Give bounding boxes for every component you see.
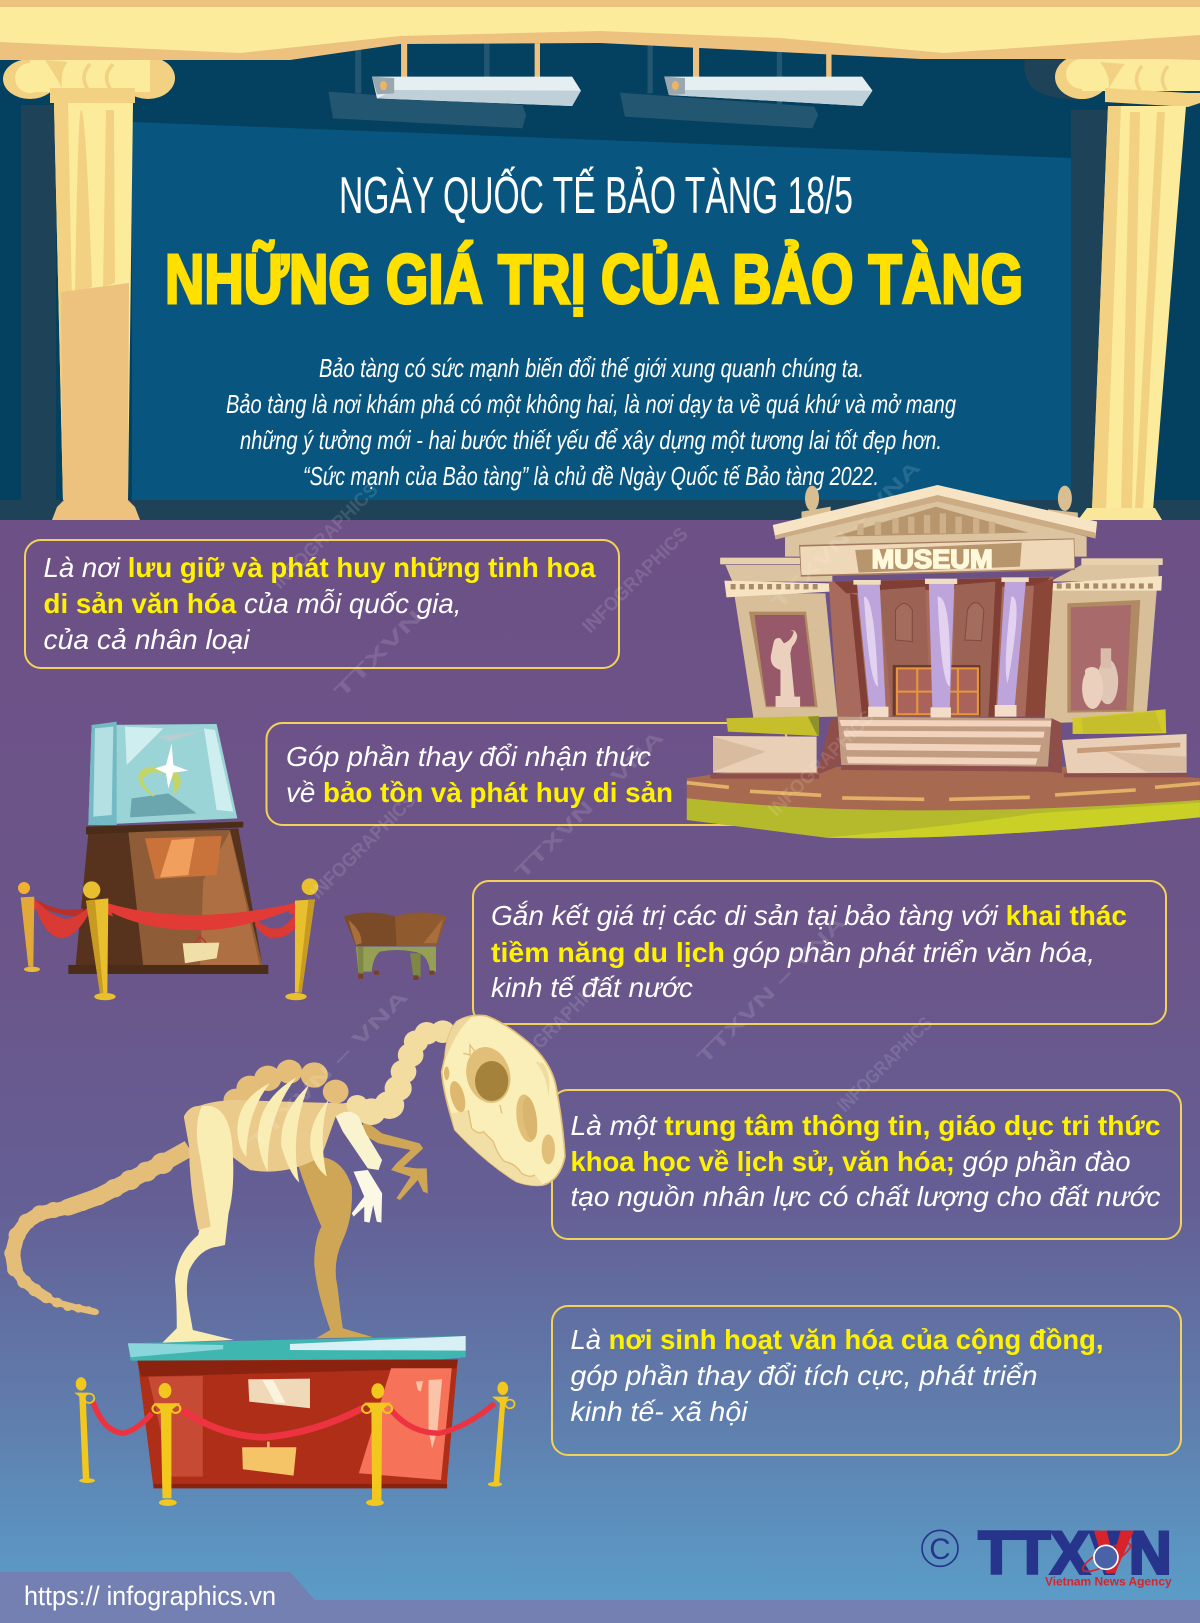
title: NGÀY QUỐC TẾ BẢO TÀNG 18/5 — [339, 166, 853, 225]
far arm — [361, 1120, 428, 1200]
illustration: museum building — [687, 485, 1200, 838]
callout box 4: tạo nguồn nhân lực có chất lượng cho đất nước — [570, 1181, 1160, 1212]
callout box 1: của cả nhân loại — [44, 624, 250, 655]
callout box 5: góp phần thay đổi tích cực, phát triển — [570, 1360, 1038, 1391]
illustration: dinosaur skeleton on red plinth — [4, 1020, 515, 1506]
callout box 4 — [552, 1090, 1181, 1239]
near hind leg — [162, 1106, 234, 1343]
ribs — [237, 1077, 329, 1183]
intro text: Bảo tàng là nơi khám phá có một không hai, là nơi dạy ta về quá khứ và mở mang — [226, 389, 956, 419]
callout box 5 — [552, 1306, 1181, 1455]
intro text — [226, 353, 956, 491]
ceiling lamp right — [620, 43, 872, 128]
intro text: “Sức mạnh của Bảo tàng” là chủ đề Ngày Quốc tế Bảo tàng 2022. — [303, 461, 879, 491]
plinth — [128, 1336, 466, 1488]
illustration: glass display case on brown stand — [18, 722, 318, 1000]
logo: copyright and TTXVN: C — [929, 1533, 951, 1566]
intro text: Bảo tàng có sức mạnh biến đổi thế giới xung quanh chúng ta. — [319, 353, 864, 383]
illustration: dinosaur skull — [442, 1015, 565, 1185]
callout box 5: kinh tế- xã hội — [570, 1396, 748, 1427]
stanchions and ropes — [74, 1377, 515, 1506]
callout box 2 text: về bảo tồn và phát huy di sản — [286, 777, 673, 808]
footer url: https:// infographics.vn — [24, 1581, 276, 1611]
watermarks: INFOGRAPHICS — [269, 480, 383, 594]
panel: museum hall header — [0, 30, 1200, 520]
watermarks: INFOGRAPHICS — [834, 1013, 937, 1117]
watermarks: INFOGRAPHICS — [307, 790, 421, 904]
watermarks — [246, 457, 937, 1154]
callout box 3 — [473, 881, 1166, 1024]
watermarks: INFOGRAPHICS — [579, 524, 693, 638]
far leg — [296, 1157, 373, 1338]
watermarks: GRAPHICS — [529, 972, 611, 1054]
left column — [3, 56, 175, 520]
callout box 3: kinh tế đất nước — [491, 972, 693, 1003]
neck — [346, 1020, 455, 1125]
callout box 4: Là một trung tâm thông tin, giáo dục tri thức — [570, 1110, 1160, 1141]
watermarks: TTXVN – VNA — [694, 912, 850, 1069]
watermarks: TTXVN – VNA — [246, 986, 413, 1154]
logo: copyright and TTXVN: Vietnam News Agency — [1045, 1574, 1172, 1588]
callout box 1: di sản văn hóa của mỗi quốc gia, — [44, 588, 462, 619]
callout box 4: khoa học về lịch sử, văn hóa; góp phần đào — [570, 1146, 1130, 1177]
watermarks: TTXVN — [331, 606, 427, 703]
watermarks: TTXVN – VNA — [512, 727, 668, 884]
callout box 1 — [25, 540, 619, 668]
callout box 2 text — [286, 741, 673, 808]
logo: copyright and TTXVN: TTXVN — [978, 1518, 1172, 1586]
ceiling lamp left — [328, 43, 581, 128]
footer bar — [0, 1572, 1200, 1623]
spine back — [224, 1060, 349, 1111]
callout box 1: Là nơi lưu giữ và phát huy những tinh hoa — [44, 552, 596, 583]
callout box 2 text: Góp phần thay đổi nhận thức — [286, 741, 651, 772]
callout box 3: tiềm năng du lịch góp phần phát triển văn hóa, — [491, 937, 1095, 968]
panel: purple-to-blue background — [0, 520, 1200, 1623]
watermarks: INFOGRAPHICS — [765, 707, 879, 821]
right column — [1055, 55, 1200, 520]
tail — [4, 1148, 189, 1315]
callout box 3: Gắn kết giá trị các di sản tại bảo tàng với khai thác — [491, 900, 1127, 931]
intro text: những ý tưởng mới - hai bước thiết yếu để xây dựng một tương lai tốt đẹp hơn. — [240, 425, 942, 455]
watermarks: TTXVN – VNA — [769, 457, 925, 614]
callout box 2 outline — [266, 723, 786, 825]
callout box 5: Là nơi sinh hoạt văn hóa của cộng đồng, — [570, 1324, 1104, 1355]
illustration: small brown bench — [344, 912, 447, 980]
ceiling beam — [0, 0, 1200, 60]
illustration: museum building: MUSEUM — [872, 545, 993, 574]
near arm — [336, 1112, 382, 1170]
